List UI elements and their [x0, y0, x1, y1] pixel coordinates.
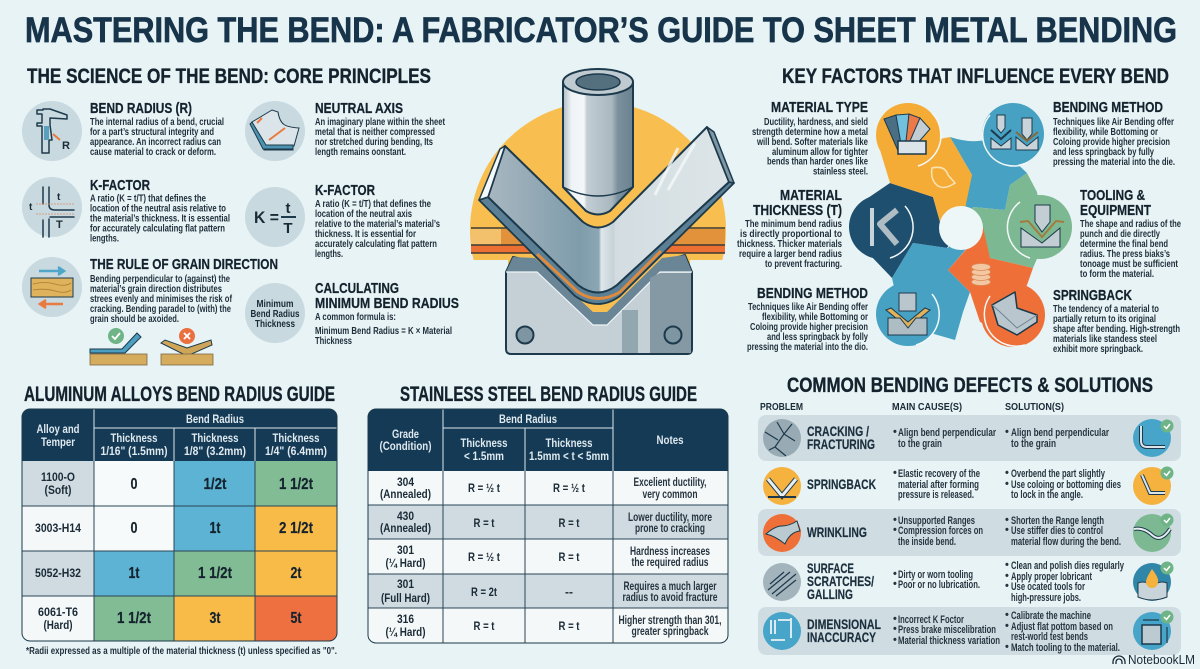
text: bend radius: cause material to crack or deform.	[90, 146, 216, 158]
heading: aluminum guide: ALUMINUM ALLOYS BEND RADIUS GUIDE	[24, 383, 335, 406]
icon: minimum bend radius badge: Minimum	[256, 298, 294, 310]
table: stainless steel: 304	[397, 475, 414, 489]
table: aluminum alloys: Thickness	[272, 433, 320, 445]
row: scratches: •	[893, 568, 897, 580]
icon: k formula: t	[286, 200, 290, 217]
text: grain direction: cracking. Bending paradel to (with) the	[90, 303, 231, 315]
table: aluminum alloys: 1 1/2t	[198, 565, 233, 582]
row: wrinkling: the inside bend.	[898, 536, 956, 548]
icon: k-factor diagram: t	[57, 192, 61, 203]
table: stainless steel: Bend Radius	[499, 414, 557, 426]
column headers	[760, 401, 1064, 413]
table: stainless steel: < 1.5mm	[464, 451, 504, 463]
text: bending method left: flexibility, while Bottoming or	[762, 311, 868, 323]
text: material type: Ductility, hardness, and sield	[764, 116, 868, 128]
bent sheet	[479, 127, 734, 304]
row: cracking: FRACTURING	[807, 436, 875, 452]
segment: yellow	[876, 103, 972, 228]
table: stainless steel: R = 2t	[471, 585, 497, 599]
row: scratches: Clean and polish dies regularly	[1011, 560, 1125, 572]
table: stainless steel: (¼ Hard)	[386, 625, 426, 639]
row: dimensional inaccuracy: •	[1005, 609, 1009, 621]
icon: k formula	[245, 187, 305, 247]
row: cracking	[763, 419, 1174, 457]
text: tooling and equipment: EQUIPMENT	[1080, 202, 1151, 219]
row: dimensional inaccuracy: rest-world test bends	[1011, 631, 1088, 643]
icon: correct bend with check	[90, 328, 147, 365]
table: aluminum alloys: 1 1/2t	[279, 476, 314, 493]
icon: k-factor diagram: T	[56, 219, 63, 231]
row: cracking: •	[1005, 426, 1009, 438]
row: dimensional inaccuracy: Material thickness variation	[898, 635, 1000, 647]
row: dimensional inaccuracy: •	[1005, 641, 1009, 653]
segment: dark navy	[849, 183, 961, 278]
table: aluminum alloys: 1 1/2t	[117, 610, 152, 627]
segment: top blue	[950, 103, 1044, 228]
row: springback: •	[893, 467, 897, 479]
row bands	[758, 415, 1181, 655]
text: neutral axis: An imaginary plane within the sheet	[315, 116, 445, 128]
table: stainless steel: prone to cracking	[635, 523, 705, 535]
text: bend radius: BEND RADIUS (R)	[90, 100, 192, 117]
row: wrinkling: •	[893, 514, 897, 526]
table: stainless steel: Thickness	[460, 438, 508, 450]
table: aluminum alloys: Thickness	[192, 433, 238, 445]
table: stainless steel: R = t	[474, 516, 494, 530]
text: bending method left: and less springback by folly	[767, 331, 868, 343]
text: k-factor right: K-FACTOR	[315, 182, 375, 199]
table: stainless steel: (Annealed)	[380, 487, 431, 501]
row: springback: •	[1005, 467, 1009, 479]
row: wrinkling: •	[1005, 524, 1009, 536]
diagram: six factor puzzle wheel	[849, 103, 1072, 347]
table: aluminum alloys: 1t	[128, 565, 140, 582]
panel: key factors	[737, 65, 1181, 355]
row: dimensional inaccuracy: •	[1005, 620, 1009, 632]
row: wrinkling: Compression forces on	[898, 525, 983, 537]
text: tooling and equipment: punch and die directly	[1080, 228, 1160, 240]
table: aluminum alloys: 1100-O	[41, 470, 75, 484]
table: stainless steel: (Full Hard)	[381, 591, 430, 605]
heat bands	[471, 228, 725, 253]
punch	[563, 69, 633, 214]
icon: minimum bend radius badge: Bend Radius	[250, 308, 300, 320]
table: aluminum alloys: 0	[130, 520, 138, 537]
text: k-factor right: location of the neutral axis	[315, 208, 412, 220]
icon: lubricant drop	[1133, 562, 1174, 601]
table: stainless steel: R = t	[474, 619, 494, 633]
table: stainless steel: R = ½ t	[468, 481, 500, 495]
table: aluminum alloys: 2 1/2t	[279, 520, 314, 537]
icon: measured square	[1133, 610, 1174, 650]
text: material thickness: require a larger bend radius	[739, 248, 842, 260]
row: scratches: •	[1005, 570, 1009, 582]
text: material type: strength determine how a metal	[752, 126, 868, 138]
row: wrinkling: material flow during the bend.	[1011, 536, 1121, 548]
text: bending method left: Coloing provide higher precision	[750, 321, 868, 333]
text: tooling and equipment: TOOLING &	[1080, 187, 1145, 204]
text: grain direction: material’s grain direction distributes	[90, 283, 222, 295]
table: stainless steel: R = t	[558, 619, 580, 633]
table: stainless steel: (Annealed)	[380, 521, 431, 535]
row: dimensional inaccuracy: Incorrect K Foctor	[898, 614, 964, 626]
icon: punch bottom blue	[886, 293, 930, 335]
text: grain direction: THE RULE OF GRAIN DIRECTION	[90, 256, 278, 273]
text: k-factor left: K-FACTOR	[90, 177, 150, 194]
row: dimensional inaccuracy: Match tooling to the material.	[1011, 642, 1120, 654]
table: stainless steel: Grade	[392, 429, 419, 441]
text: grain direction	[90, 256, 278, 325]
row: wrinkling: •	[1005, 514, 1009, 526]
icon: punch and die green	[1020, 205, 1064, 247]
table: stainless steel: R = ½ t	[468, 550, 500, 564]
text: springback: materials like standess steel	[1053, 333, 1157, 345]
row: dimensional inaccuracy: Press brake miscelibration	[898, 624, 996, 636]
row: wrinkling: •	[893, 524, 897, 536]
row: springback: material after forming	[898, 479, 979, 491]
table: aluminum alloys: 1/4" (6.4mm)	[265, 446, 327, 458]
icon: wrinkled sheet	[763, 514, 801, 552]
segment: green	[961, 173, 1072, 268]
center hole	[939, 206, 983, 250]
die block	[506, 255, 692, 354]
text: calculating minimum bend radius	[315, 280, 459, 347]
table: stainless steel: --	[565, 585, 573, 599]
table: stainless steel: radius to avoid fracture	[622, 592, 718, 604]
table: aluminum alloys: Bend Radius	[186, 414, 244, 426]
text: material type: stainless steel.	[813, 166, 868, 178]
text: k-factor left: for accurately calculating flat pattern	[90, 222, 225, 234]
text: material thickness: thickness. Thicker materials	[737, 238, 842, 250]
text: neutral axis: length remains oonstant.	[315, 146, 406, 158]
table: stainless steel: 316	[397, 612, 414, 626]
text: calculating minimum bend radius: MINIMUM BEND RADIUS	[315, 295, 459, 312]
row: wrinkling	[763, 514, 1174, 552]
row: springback: to lock in the angle.	[1011, 489, 1083, 501]
table: stainless steel: Requires a much larger	[624, 581, 717, 593]
icon: neutral axis	[245, 101, 305, 161]
text: bending method left	[747, 285, 868, 353]
table: stainless steel: R = t	[558, 516, 580, 530]
icon: radius gauge	[1133, 419, 1174, 457]
row: springback: pressure is released.	[898, 489, 974, 501]
row: cracking: Align bend perpendicular	[898, 427, 997, 439]
text: bending method right: and less springback by fully	[1053, 146, 1154, 158]
table: aluminum alloys: 6061-T6	[38, 605, 78, 619]
table: stainless steel: Hardness increases	[630, 546, 710, 558]
column headers: PROBLEM	[760, 401, 803, 413]
table: aluminum alloys: 0	[130, 476, 138, 493]
row: cracking: to the grain	[1011, 438, 1056, 450]
icon: minimum bend radius badge: Thickness	[255, 318, 295, 330]
text: bend radius	[90, 100, 224, 158]
table: aluminum alloys: 1/2t	[204, 476, 227, 493]
text: k-factor left: location of the neutral asis relative to	[90, 202, 226, 214]
row: wrinkling: Shorten the Range length	[1011, 515, 1104, 527]
text: bending method left: BENDING METHOD	[757, 285, 868, 302]
table: stainless steel: 301	[397, 543, 414, 557]
table: aluminum alloys: Temper	[41, 437, 75, 449]
row: dimensional inaccuracy: Adjust flat pottom based on	[1011, 621, 1113, 633]
icon: grain direction	[22, 257, 82, 317]
icon: scratches	[763, 563, 801, 601]
table: stainless steel: Higher strength than 301,	[618, 615, 722, 627]
icon: K bend shapes	[870, 208, 897, 246]
row: springback: Use coloing or bottoming dies	[1011, 479, 1121, 491]
icon: overbend	[1133, 466, 1174, 505]
text: k-factor right: A ratio (K = t/T) that defines the	[315, 198, 431, 210]
table: aluminum alloys: Thickness	[110, 433, 158, 445]
text: grain direction: grain should be axoided.	[90, 313, 179, 325]
text: springback: partially return to its original	[1053, 313, 1156, 325]
table: aluminum alloys: 1t	[210, 520, 221, 537]
column headers: MAIN CAUSE(S)	[892, 401, 962, 413]
row: scratches: •	[893, 578, 897, 590]
text: k-factor right: relative to the material’s material’s	[315, 218, 440, 230]
text: neutral axis: NEUTRAL AXIS	[315, 100, 403, 117]
table: stainless steel: the required radius	[632, 557, 708, 569]
row: cracking: Align bend perpendicular	[1011, 427, 1110, 439]
heading: core principles: THE SCIENCE OF THE BEND: CORE PRINCIPLES	[27, 65, 431, 88]
text: k-factor right	[315, 182, 440, 260]
text: k-factor right: accurately calculating flat pattern	[315, 238, 437, 250]
row: dimensional inaccuracy: •	[893, 613, 897, 625]
central illustration: press brake	[470, 69, 734, 358]
text: material type: bends than harder ones like	[767, 156, 868, 168]
text: material thickness: MATERIAL	[780, 187, 842, 204]
table: stainless steel: Thickness	[546, 438, 592, 450]
icon: caliper	[22, 101, 82, 161]
row: dimensional inaccuracy	[763, 609, 1174, 654]
text: calculating minimum bend radius: Thickness	[315, 335, 352, 347]
row: cracking: CRACKING /	[807, 423, 869, 439]
segment: bottom blue	[876, 228, 970, 346]
icon: minimum bend radius badge	[245, 283, 305, 343]
text: grain direction: Bending perpendicular to (against) the	[90, 273, 230, 285]
text: material thickness	[737, 187, 842, 270]
text: bending method right: BENDING METHOD	[1053, 99, 1163, 116]
icon: coin stack	[972, 264, 990, 286]
table: aluminum alloys: (Soft)	[44, 483, 72, 497]
row: dimensional inaccuracy: Calibrate the machine	[1011, 610, 1091, 622]
text: bend radius: The internal radius of a bend, crucial	[90, 116, 224, 128]
row: scratches: Use ocated tools for	[1011, 581, 1085, 593]
text: material type	[752, 99, 868, 178]
row: scratches	[763, 559, 1174, 604]
table: aluminum alloys	[22, 409, 337, 641]
row: scratches: SURFACE	[807, 560, 854, 576]
row: wrinkling: Unsupported Ranges	[898, 515, 975, 527]
row: dimensional inaccuracy: INACCURACY	[807, 629, 876, 645]
icon: crack	[763, 419, 801, 457]
icon: k-factor diagram: t	[29, 202, 33, 213]
icon: k formula: K =	[254, 208, 279, 227]
text: springback: SPRINGBACK	[1053, 287, 1132, 304]
text: neutral axis	[315, 100, 445, 158]
white rings	[890, 113, 1030, 346]
text: k-factor left: A ratio (K = t/T) that defines the	[90, 192, 206, 204]
table: stainless steel: Notes	[656, 435, 684, 447]
table: stainless steel: R = t	[558, 550, 580, 564]
text: material thickness: to prevent fracturing.	[765, 258, 842, 270]
row: dimensional inaccuracy: •	[893, 623, 897, 635]
row: scratches: Poor or no lubrication.	[898, 579, 980, 591]
text: material thickness: THICKNESS (T)	[753, 202, 842, 219]
table: stainless steel: 1.5mm < t < 5mm	[529, 451, 609, 463]
row: scratches: high-pressure jobs.	[1011, 592, 1081, 604]
text: bending method right: flexibility, while Bottoming or	[1053, 126, 1158, 138]
row: scratches: Apply proper lobricant	[1011, 571, 1092, 583]
table: aluminum alloys: 5t	[290, 610, 302, 627]
table: aluminum alloys: 3003-H14	[35, 521, 81, 535]
text: bend radius: appearance. An incorrect radius can	[90, 136, 221, 148]
panel: core principles	[22, 65, 459, 365]
table: stainless steel: 301	[397, 577, 414, 591]
row: wrinkling: WRINKLING	[807, 524, 867, 540]
row: scratches: •	[1005, 580, 1009, 592]
row: springback: Overbend the part slightly	[1011, 468, 1106, 480]
text: material thickness: is directly proportional to	[740, 228, 842, 240]
row: springback: •	[1005, 478, 1009, 490]
table: aluminum alloys: Alloy and	[36, 424, 80, 436]
table: aluminum alloys: 1/8" (3.2mm)	[184, 446, 246, 458]
table: stainless steel: very common	[642, 489, 698, 501]
text: tooling and equipment: determine the final bend	[1080, 238, 1168, 250]
text: k-factor right: lengths.	[315, 248, 343, 260]
row: springback	[763, 466, 1174, 505]
text: k-factor left: lengths.	[90, 232, 119, 244]
row: dimensional inaccuracy: •	[893, 634, 897, 646]
table: stainless steel: 430	[397, 509, 414, 523]
row: dimensional inaccuracy: DIMENSIONAL	[807, 616, 881, 632]
text: bending method right	[1053, 99, 1175, 168]
text: k-factor right: thickness. It is essential for	[315, 228, 416, 240]
row: scratches: GALLING	[807, 586, 853, 602]
text: material type: MATERIAL TYPE	[771, 99, 868, 116]
icon: k formula: T	[283, 220, 293, 237]
text: bending method left: Techniques like Air Bending offer	[748, 301, 868, 313]
table: stainless steel: Excelient ductility,	[634, 477, 706, 489]
row: springback: SPRINGBACK	[807, 476, 876, 492]
yellow sun	[470, 107, 726, 312]
table: stainless steel: Lower ductility, more	[628, 512, 712, 524]
panel: aluminum table	[22, 383, 337, 657]
text: springback: exhibit more springback.	[1053, 343, 1143, 355]
row: wrinkling: Use stiffer dies to control	[1011, 525, 1103, 537]
table: stainless steel	[368, 409, 728, 643]
table: aluminum alloys: 2t	[290, 565, 302, 582]
text: material type: aluminum allow for tighter	[772, 146, 868, 158]
icon: material swatches	[884, 114, 930, 154]
row: scratches: SCRATCHES/	[807, 573, 874, 589]
text: grain direction: strees evenly and minimises the risk of	[90, 293, 232, 305]
icon: springback v	[763, 467, 801, 505]
text: bend radius: for a part’s structural integrity and	[90, 126, 214, 138]
row: cracking: to the grain	[898, 438, 942, 450]
icon: k-factor diagram	[22, 177, 82, 237]
heading: stainless guide: STAINLESS STEEL BEND RADIUS GUIDE	[400, 383, 697, 406]
row: cracking: •	[893, 426, 897, 438]
panel: defects and solutions	[758, 374, 1181, 655]
column headers: SOLUTION(S)	[1005, 401, 1064, 413]
text: bending method left: pressing the material into the dio.	[747, 341, 868, 353]
row: springback: Elastic recovery of the	[898, 468, 980, 480]
text: calculating minimum bend radius: A common formula is:	[315, 311, 396, 323]
row: scratches: •	[1005, 559, 1009, 571]
row: scratches: Dirty or worn tooling	[898, 569, 973, 581]
logo: NotebookLM: NotebookLM	[1128, 653, 1195, 667]
segment: orange	[948, 227, 1045, 347]
icon: caliper: R	[62, 140, 70, 152]
text: k-factor left: the material’s thickness. It is essential	[90, 212, 230, 224]
text: tooling and equipment	[1080, 187, 1181, 280]
text: springback	[1053, 287, 1180, 355]
panel: stainless table	[368, 383, 728, 643]
table: aluminum alloys: 3t	[210, 610, 221, 627]
table: stainless steel: R = ½ t	[553, 481, 585, 495]
icon: smooth wave	[1133, 514, 1174, 552]
table: stainless steel: (¼ Hard)	[386, 556, 426, 570]
text: calculating minimum bend radius: CALCULATING	[315, 280, 399, 297]
text: neutral axis: nor stretched during bending, Its	[315, 136, 433, 148]
table: stainless steel: (Condition)	[380, 441, 432, 453]
text: springback: The tendency of a material to	[1053, 303, 1159, 315]
table: aluminum alloys: (Hard)	[44, 618, 72, 632]
table: stainless steel: greater springback	[632, 626, 709, 638]
icon: springback bracket	[992, 292, 1037, 335]
text: material type: will bend. Softer materials like	[756, 136, 868, 148]
table: aluminum alloys: 1/16" (1.5mm)	[100, 446, 168, 458]
text: calculating minimum bend radius: Minimum Bend Radius = K × Material	[315, 325, 452, 337]
icon: two punches and dies	[991, 115, 1038, 150]
text: material thickness: The minimum bend radius	[745, 218, 842, 230]
footnote: *Radii expressed as a multiple of the material thickness (t) unless specified as "0".	[26, 645, 337, 657]
table: aluminum alloys: 5052-H32	[35, 566, 81, 580]
text: k-factor left	[90, 177, 230, 244]
icon: incorrect bend with x	[161, 328, 213, 365]
text: tooling and equipment: to form the material.	[1080, 268, 1154, 280]
text: neutral axis: metal that is neither compressed	[315, 126, 435, 138]
icon: inaccurate part	[763, 612, 801, 650]
